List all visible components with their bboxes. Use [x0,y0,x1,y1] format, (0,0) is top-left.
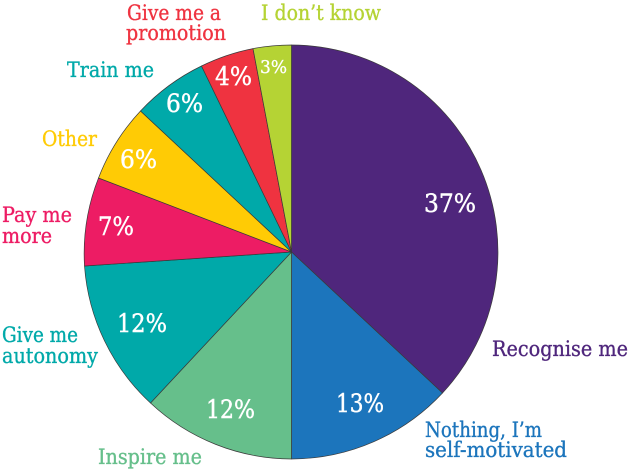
slice: Nothing, I'm self-motivated 13% [292,252,442,459]
label: Give me autonomy [2,323,98,368]
value 6% train: 6% [166,89,203,118]
label: Pay me more: more [2,224,52,248]
slice: Give me autonomy 12% [84,252,292,403]
value 12% autonomy: 12% [117,309,167,338]
label: Pay me more [2,203,72,248]
label: Give me a promotion: Give me a [127,1,221,25]
percentage values [98,57,476,424]
label: Give me autonomy: autonomy [2,344,98,368]
label: Pay me more: Pay me [2,203,72,227]
label: Nothing, I'm self-motivated [425,418,567,462]
slice: Give me a promotion 4% [202,49,292,252]
label: Give me a promotion: promotion [126,21,226,45]
slice: Other 6% [98,111,292,252]
label: Nothing, I'm self-motivated: Nothing, I’m [425,418,542,442]
label: I don't know: I don’t know [261,1,381,25]
slice: Inspire me 12% [150,252,292,459]
value 4%: 4% [215,62,252,91]
label: Inspire me: Inspire me [98,445,202,469]
slice: Recognise me 37% [292,45,498,393]
slice: I don't know 3% [253,45,292,252]
slice: Pay me more 7% [84,178,291,266]
pie chart [84,45,498,459]
value 37%: 37% [424,189,476,218]
value 7%: 7% [98,212,134,241]
label: Give me a promotion [126,1,226,45]
label: Nothing, I'm self-motivated: self-motivated [425,438,567,462]
slice: Train me 6% [140,66,292,252]
value 12% inspire: 12% [206,395,255,424]
value 13%: 13% [336,389,384,418]
label: Other: Other [42,127,98,151]
label: Train me: Train me [67,58,154,82]
value 3%: 3% [260,57,287,78]
value 6% other: 6% [120,145,157,174]
label: Give me autonomy: Give me [2,323,78,347]
